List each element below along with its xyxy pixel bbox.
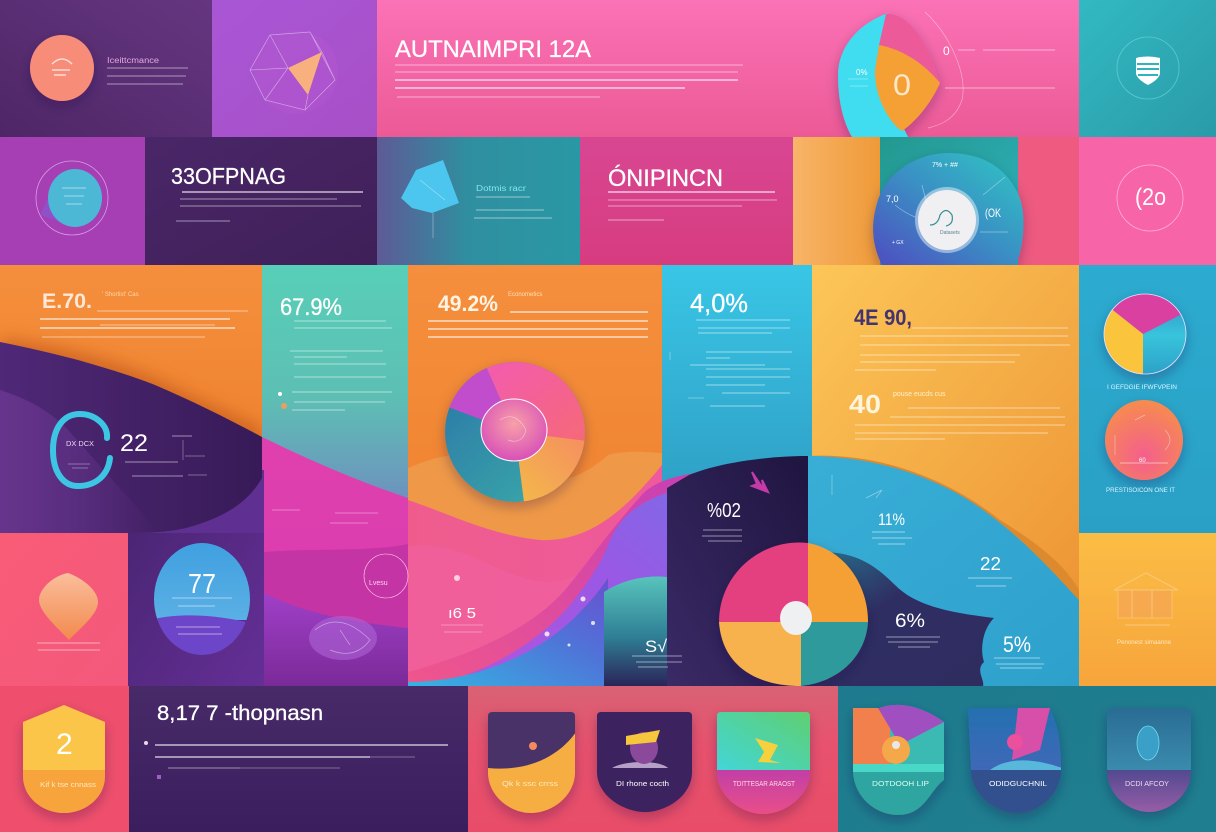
caption	[37, 643, 100, 650]
shield: sun	[853, 700, 944, 816]
panel: purple oval	[128, 470, 264, 686]
heading: 8,17 7 -thopnasn	[157, 702, 323, 725]
list lines	[290, 321, 392, 410]
icon: wire circle	[364, 554, 408, 598]
badge oval with value	[154, 543, 250, 655]
shield: purple portrait	[597, 712, 693, 814]
pie value: 0	[893, 69, 911, 102]
value: %02	[707, 500, 741, 522]
stat 6%: 6%	[895, 611, 925, 632]
teal dome	[604, 576, 667, 686]
caption: DOTDOOH LIP	[872, 781, 929, 788]
panel: heading block	[145, 137, 377, 265]
oval notes	[172, 598, 232, 634]
list lines	[690, 320, 792, 406]
stat: E.70.	[42, 290, 92, 313]
orange orb: 60	[1139, 458, 1146, 464]
stat 11: 11%	[878, 510, 905, 529]
ring gauge	[53, 414, 110, 486]
text lines	[42, 311, 248, 337]
icon: magenta arrow	[752, 472, 768, 492]
panel: network triangle	[212, 0, 377, 137]
panel: bottom heading	[129, 686, 468, 832]
pie callouts	[925, 12, 1055, 128]
panel: left orange stat: ' Shortist' Cas	[102, 292, 139, 298]
ribbon dots	[544, 596, 595, 646]
title description lines	[395, 65, 743, 72]
orange orb	[1105, 400, 1183, 480]
panel: top left intro	[0, 0, 212, 137]
panel: left orange stat	[0, 265, 262, 437]
stat 22: 22	[980, 554, 1001, 574]
icon: wire globe with triangle	[250, 30, 338, 114]
lower purple wave	[264, 593, 408, 686]
chart: quadrant pie	[719, 543, 868, 686]
pink stat: ı6 5	[448, 605, 476, 622]
gauge centre dial	[915, 187, 979, 253]
pie inner circle	[481, 399, 547, 461]
icon: coral circle	[30, 35, 94, 101]
panel: blue column stat	[662, 265, 812, 490]
panel: house	[1079, 533, 1216, 686]
shield: droplet	[1107, 708, 1191, 814]
icon: wire brain	[309, 616, 377, 660]
gauge labels: 7,0	[886, 194, 899, 204]
title: AUTNAIMPRI 12A	[395, 36, 591, 63]
panel: center orange	[408, 265, 662, 560]
ring notes	[125, 436, 192, 476]
lines	[855, 328, 1070, 370]
ring text: DX DCX	[66, 441, 94, 448]
gauge labels: 7% + ##	[932, 162, 958, 169]
stat dark: 4E 90,	[854, 305, 912, 330]
stat: 67.9%	[280, 294, 342, 321]
icon: house outline	[1114, 573, 1178, 625]
caption: Penonest simaanne	[1117, 639, 1171, 646]
caption: TDITTESAR ARAOST	[733, 781, 796, 788]
stat: 49.2%	[438, 291, 498, 316]
caption: Qk k ssc crrss	[502, 781, 559, 788]
gem caption: Dotmis racr	[476, 184, 526, 193]
bullet lines	[182, 191, 363, 193]
note lines	[272, 510, 378, 523]
gauge centre dial: Datasets	[940, 230, 960, 236]
caption: ODIDGUCHNIL	[989, 781, 1047, 788]
icon: cyan blob	[36, 161, 108, 235]
ring with number: (2o	[1135, 184, 1166, 211]
panel: pink lower centre	[408, 465, 662, 686]
panel: main title banner	[377, 0, 1079, 137]
caption 2: PRESTISOICON ONE IT	[1106, 487, 1175, 494]
heading: ÓNIPINCN	[608, 165, 723, 192]
value bottom: S√	[645, 637, 668, 656]
panel: orange and teal gauge	[793, 137, 1079, 265]
panel: magenta wave	[262, 437, 408, 686]
gauge labels	[886, 162, 1008, 246]
dark wave	[0, 342, 262, 533]
number: 2	[56, 728, 73, 761]
panel: ribbons	[408, 473, 695, 686]
centre knob	[780, 601, 812, 635]
stat 5%: 5%	[1003, 632, 1031, 657]
panel: teal shields	[838, 686, 1216, 832]
gauge labels: (OK	[985, 206, 1001, 220]
gauge labels: + GX	[892, 240, 904, 246]
magenta ribbon	[408, 473, 695, 686]
panel: center orange: Econometics	[508, 292, 542, 298]
wave highlight	[408, 520, 640, 686]
panel: blob icon	[0, 137, 145, 265]
panel: main title banner: 0%	[856, 68, 868, 77]
shield	[23, 705, 106, 815]
arc dark wave	[808, 552, 994, 686]
panel: teal gem	[377, 137, 580, 265]
panel: dark centre	[604, 456, 808, 686]
text lines	[608, 191, 775, 193]
panel: purple wave with ring gauge	[0, 342, 262, 533]
blue ribbon	[408, 578, 608, 686]
darker wave	[264, 544, 408, 630]
stat 40: 40	[849, 389, 881, 419]
label text: Iceittcmance	[107, 56, 160, 65]
chart: multicolour pie	[440, 355, 595, 510]
panel: orange shield	[0, 686, 129, 832]
shield: blue	[968, 708, 1062, 814]
panel: orange-yellow text	[812, 265, 1079, 590]
lines	[155, 745, 448, 757]
icon: wire circle: Lvesu	[369, 580, 388, 587]
panel: shield icon	[1079, 0, 1216, 137]
panel: orange-yellow text: pouse eucds cus	[893, 391, 946, 398]
panel: right blue charts	[1079, 265, 1216, 533]
gauge blob	[873, 153, 1024, 265]
pie callouts: 0	[943, 44, 950, 58]
hill	[408, 452, 662, 560]
panel: blue arc	[808, 456, 1079, 686]
caption: Kif k tse cnnass	[40, 782, 97, 789]
pie chart: cyan pink orange	[838, 13, 940, 137]
caption: DI rhone cocth	[616, 781, 669, 788]
text lines	[428, 312, 648, 337]
shield: green magenta	[717, 712, 811, 815]
wave shadow	[0, 334, 262, 437]
pink stat	[441, 575, 483, 632]
panel: second heading	[580, 137, 793, 265]
value 77: 77	[188, 568, 216, 599]
caption: DCDI AFCOY	[1125, 781, 1169, 788]
panel: pink ring	[1079, 137, 1216, 265]
heading: 33OFPNAG	[171, 163, 286, 189]
shield: dark and yellow	[488, 712, 576, 814]
panel: coral gem	[0, 533, 128, 686]
violet ribbon	[465, 492, 667, 676]
value 22: 22	[120, 430, 148, 457]
icon: gem drop	[39, 573, 98, 640]
stat: 4,0%	[690, 288, 748, 318]
pie chart small	[1100, 285, 1190, 380]
caption: I GEFDGIE IFWFVPEIN	[1107, 384, 1177, 391]
panel: teal column	[262, 265, 408, 505]
icon: striped shield in ring	[1117, 37, 1179, 99]
icon: blue gem	[401, 160, 459, 238]
panel: red shields	[468, 686, 838, 832]
lighter wave	[0, 390, 160, 533]
